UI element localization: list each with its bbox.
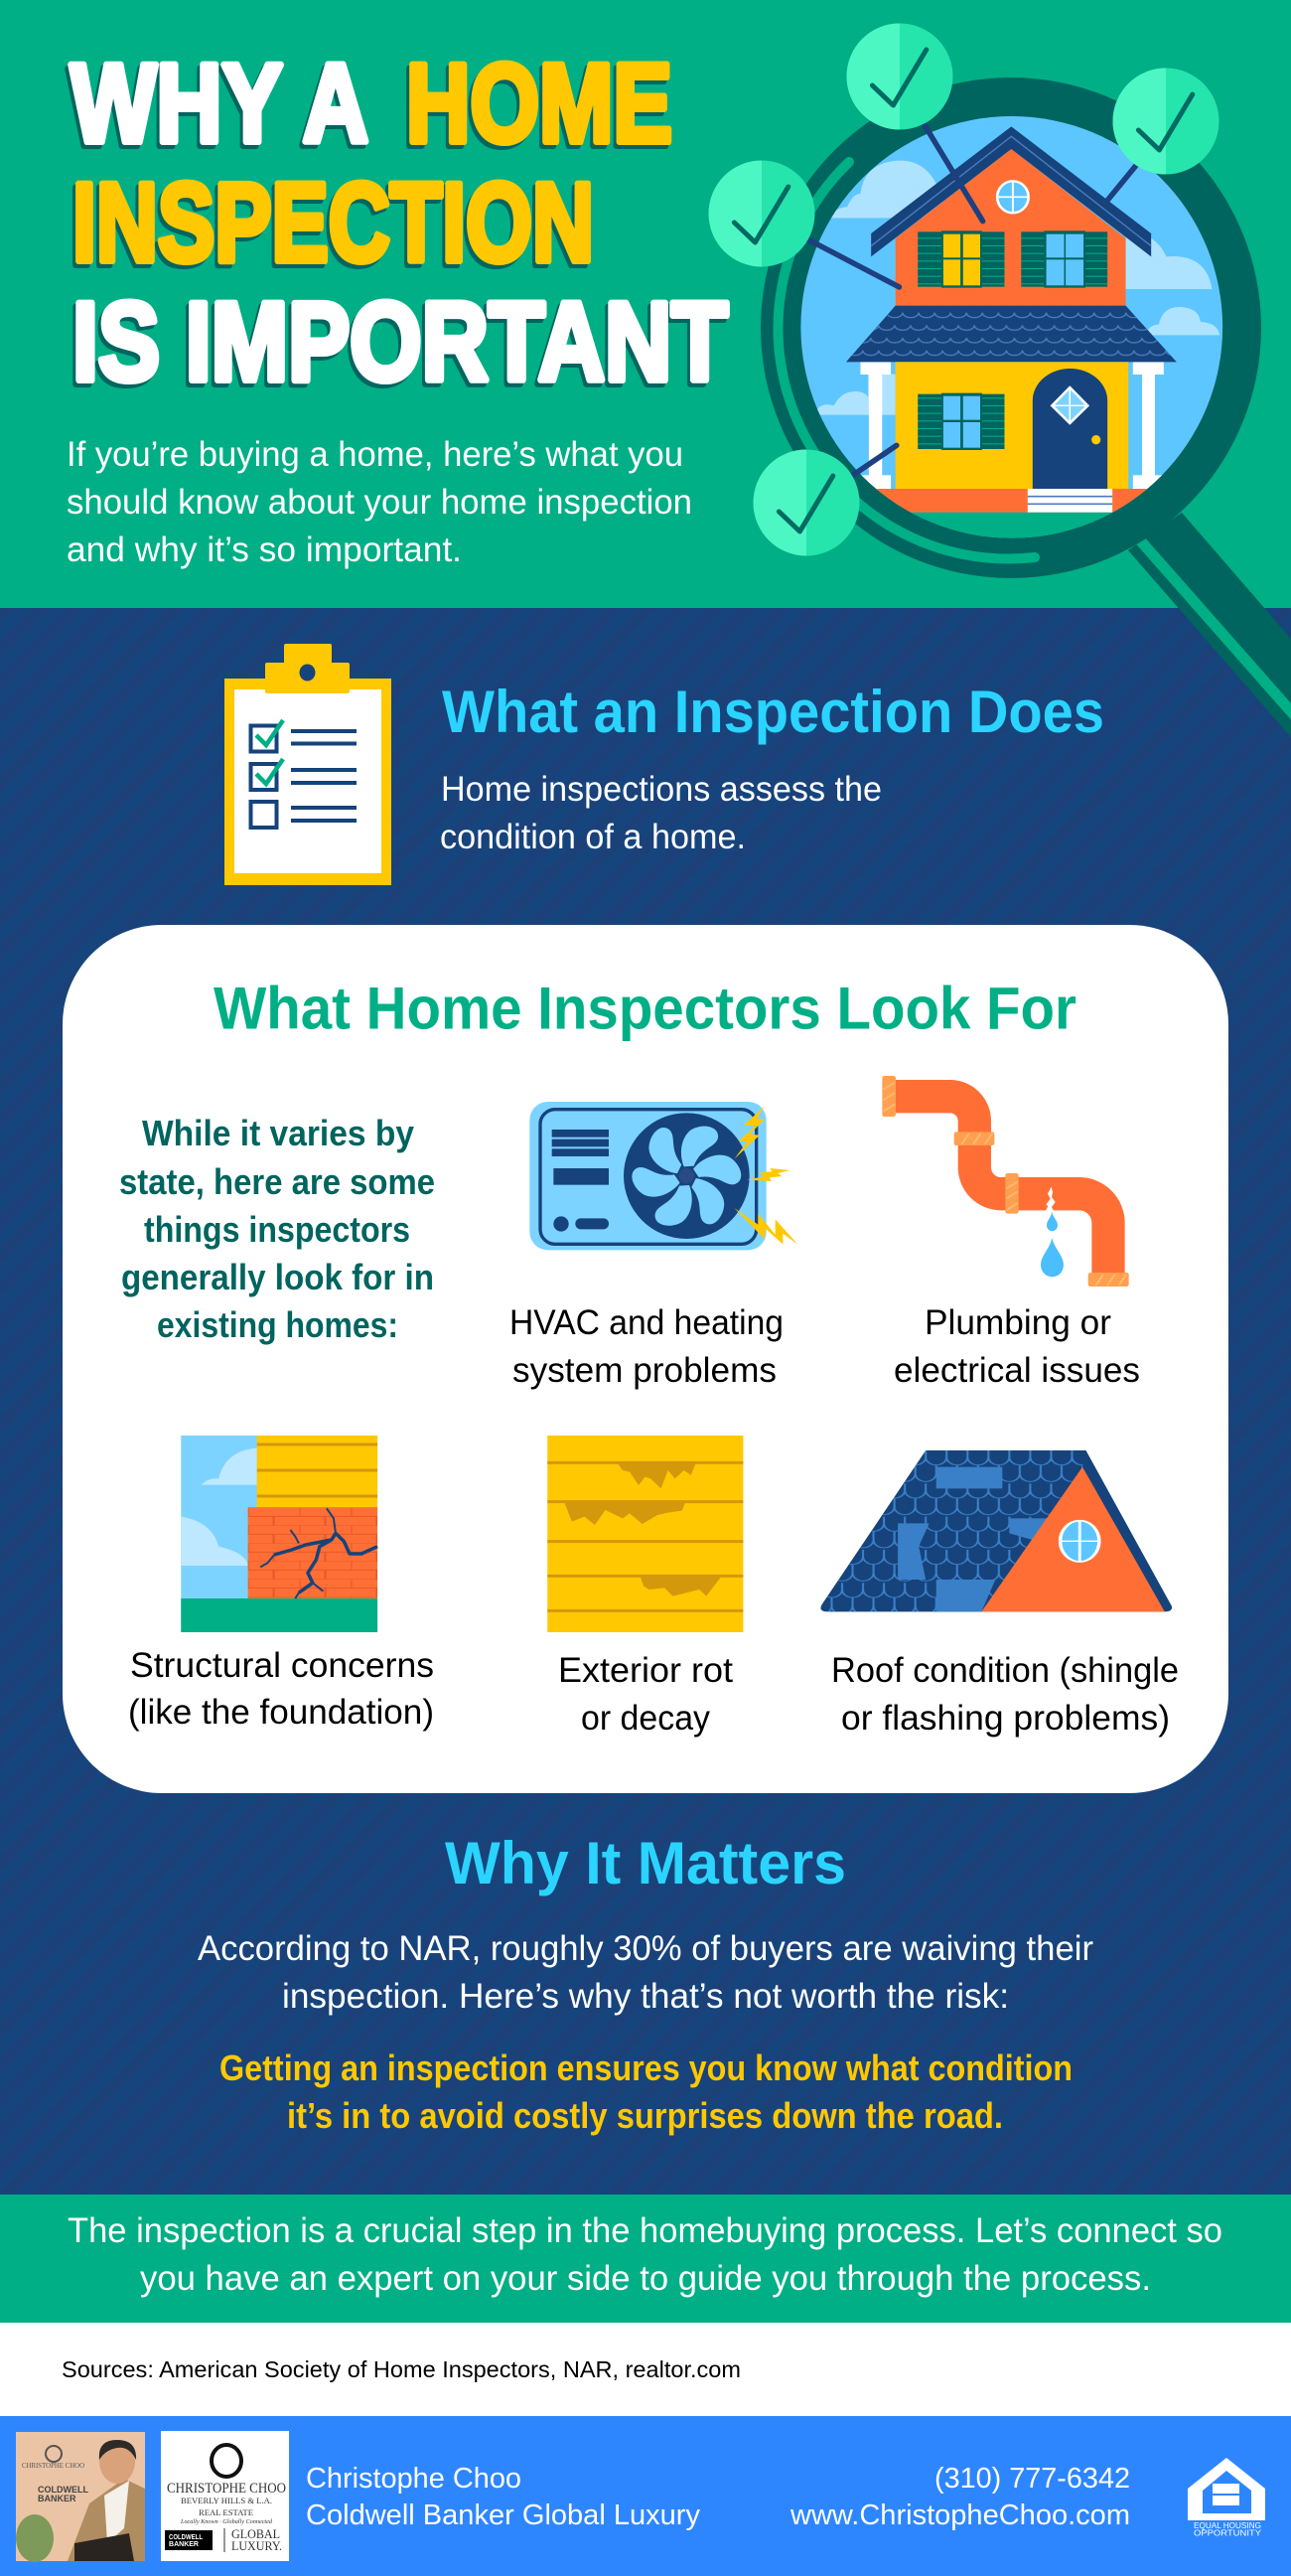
text: sources: Sources: American Society of Home Inspectors, NAR, realtor.com <box>62 2356 741 2382</box>
panel: what home inspectors look for <box>63 925 1228 1793</box>
caption: roof condition: or flashing problems) <box>841 1699 1170 1738</box>
call to action band: you have an expert on your side to guide you through the process. <box>140 2259 1151 2298</box>
title <box>71 42 728 403</box>
agent logo: GLOBAL <box>231 2526 280 2541</box>
caption: structural: Structural concerns <box>130 1646 434 1685</box>
text: inspection description <box>440 770 882 856</box>
ring highlight <box>779 162 1035 559</box>
caption: structural <box>128 1646 434 1732</box>
icon: equal housing opportunity: OPPORTUNITY <box>1194 2529 1262 2537</box>
icon: equal housing opportunity <box>1188 2458 1265 2537</box>
agent photo: CHRISTOPHE CHOO <box>22 2462 84 2470</box>
background: green header <box>0 0 1291 608</box>
caption: plumbing: Plumbing or <box>925 1303 1111 1342</box>
footer bar <box>0 2416 1291 2576</box>
text: intro to list <box>119 1113 435 1345</box>
agent photo: BANKER <box>38 2494 76 2503</box>
icon: clipboard checklist <box>224 644 391 885</box>
title: WHY A <box>71 42 368 165</box>
caption: exterior rot: Exterior rot <box>558 1651 733 1690</box>
text: intro to list: While it varies by <box>142 1113 414 1153</box>
heading: what an inspection does: What an Inspection Does <box>442 679 1104 745</box>
intro text <box>67 435 692 569</box>
agent logo: LUXURY. <box>231 2538 282 2553</box>
text: intro to list: things inspectors <box>144 1209 410 1250</box>
agent logo: COLDWELL <box>169 2534 204 2541</box>
caption: structural: (like the foundation) <box>128 1693 434 1732</box>
agent name and company: Coldwell Banker Global Luxury <box>306 2500 700 2531</box>
agent logo: REAL ESTATE <box>199 2508 253 2517</box>
handle highlight <box>1141 541 1291 718</box>
agent name and company <box>306 2463 700 2531</box>
icon: leaking pipe <box>882 1076 1129 1287</box>
contact details: www.ChristopheChoo.com <box>789 2500 1130 2531</box>
text: NAR statistic: inspection. Here’s why that’s not worth the risk: <box>282 1977 1009 2016</box>
agent logo: CHRISTOPHE CHOO <box>167 2481 286 2497</box>
text: inspection description: condition of a home. <box>440 818 746 856</box>
title: HOME <box>406 42 672 165</box>
check badge 2 <box>1112 68 1219 175</box>
icon: roof <box>820 1450 1172 1611</box>
agent photo <box>16 2432 145 2562</box>
text: highlighted takeaway: Getting an inspection ensures you know what condition <box>219 2047 1073 2088</box>
magnifier ring <box>761 77 1261 578</box>
text: intro to list: generally look for in <box>121 1257 434 1297</box>
heading: look for: What Home Inspectors Look For <box>214 976 1076 1041</box>
background: navy striped section <box>0 608 1291 2195</box>
intro text: should know about your home inspection <box>67 483 692 522</box>
call to action band <box>0 2195 1291 2323</box>
contact details: (310) 777-6342 <box>934 2463 1130 2495</box>
check badge 3 <box>709 161 814 266</box>
icon: equal housing opportunity: EQUAL HOUSING <box>1194 2521 1261 2530</box>
text: intro to list: existing homes: <box>157 1304 398 1345</box>
caption: hvac <box>509 1303 784 1390</box>
caption: roof condition: Roof condition (shingle <box>831 1651 1179 1690</box>
agent logo <box>161 2431 289 2561</box>
icon: hvac unit <box>529 1102 797 1250</box>
icon: structural crack <box>181 1436 377 1632</box>
text: NAR statistic <box>198 1929 1093 2016</box>
agent name and company: Christophe Choo <box>306 2463 521 2495</box>
icon: exterior rot <box>547 1436 743 1632</box>
caption: plumbing <box>894 1303 1140 1390</box>
text: inspection description: Home inspections assess the <box>441 770 882 809</box>
contact details <box>789 2463 1130 2531</box>
magnifier handle <box>1128 513 1291 737</box>
icon: magnifying glass with house <box>709 24 1291 737</box>
check badge 4 <box>753 449 860 556</box>
heading: why it matters: Why It Matters <box>445 1830 846 1896</box>
agent logo: BANKER <box>169 2541 199 2548</box>
agent logo: BEVERLY HILLS & L.A. <box>181 2497 272 2505</box>
caption: hvac: HVAC and heating <box>509 1303 784 1342</box>
title: IS IMPORTANT <box>72 280 728 403</box>
caption: plumbing: electrical issues <box>894 1351 1140 1390</box>
agent photo: COLDWELL <box>38 2485 88 2495</box>
house scene in lens <box>797 112 1227 545</box>
agent logo: Locally Known · Globally Connected <box>180 2519 273 2525</box>
check badge 1 <box>846 24 953 129</box>
caption: hvac: system problems <box>512 1351 777 1390</box>
text: intro to list: state, here are some <box>119 1161 435 1202</box>
intro text: and why it’s so important. <box>67 530 462 569</box>
caption: exterior rot <box>558 1651 733 1738</box>
intro text: If you’re buying a home, here’s what you <box>67 435 683 474</box>
caption: exterior rot: or decay <box>581 1699 710 1738</box>
caption: roof condition <box>831 1651 1179 1738</box>
title: INSPECTION <box>72 161 594 284</box>
text: NAR statistic: According to NAR, roughly 30% of buyers are waiving their <box>198 1929 1093 1968</box>
text: highlighted takeaway: it’s in to avoid costly surprises down the road. <box>287 2095 1003 2136</box>
call to action band: The inspection is a crucial step in the homebuying process. Let’s connect so <box>68 2211 1222 2250</box>
text: highlighted takeaway <box>219 2047 1073 2136</box>
connector lines <box>809 126 1136 475</box>
